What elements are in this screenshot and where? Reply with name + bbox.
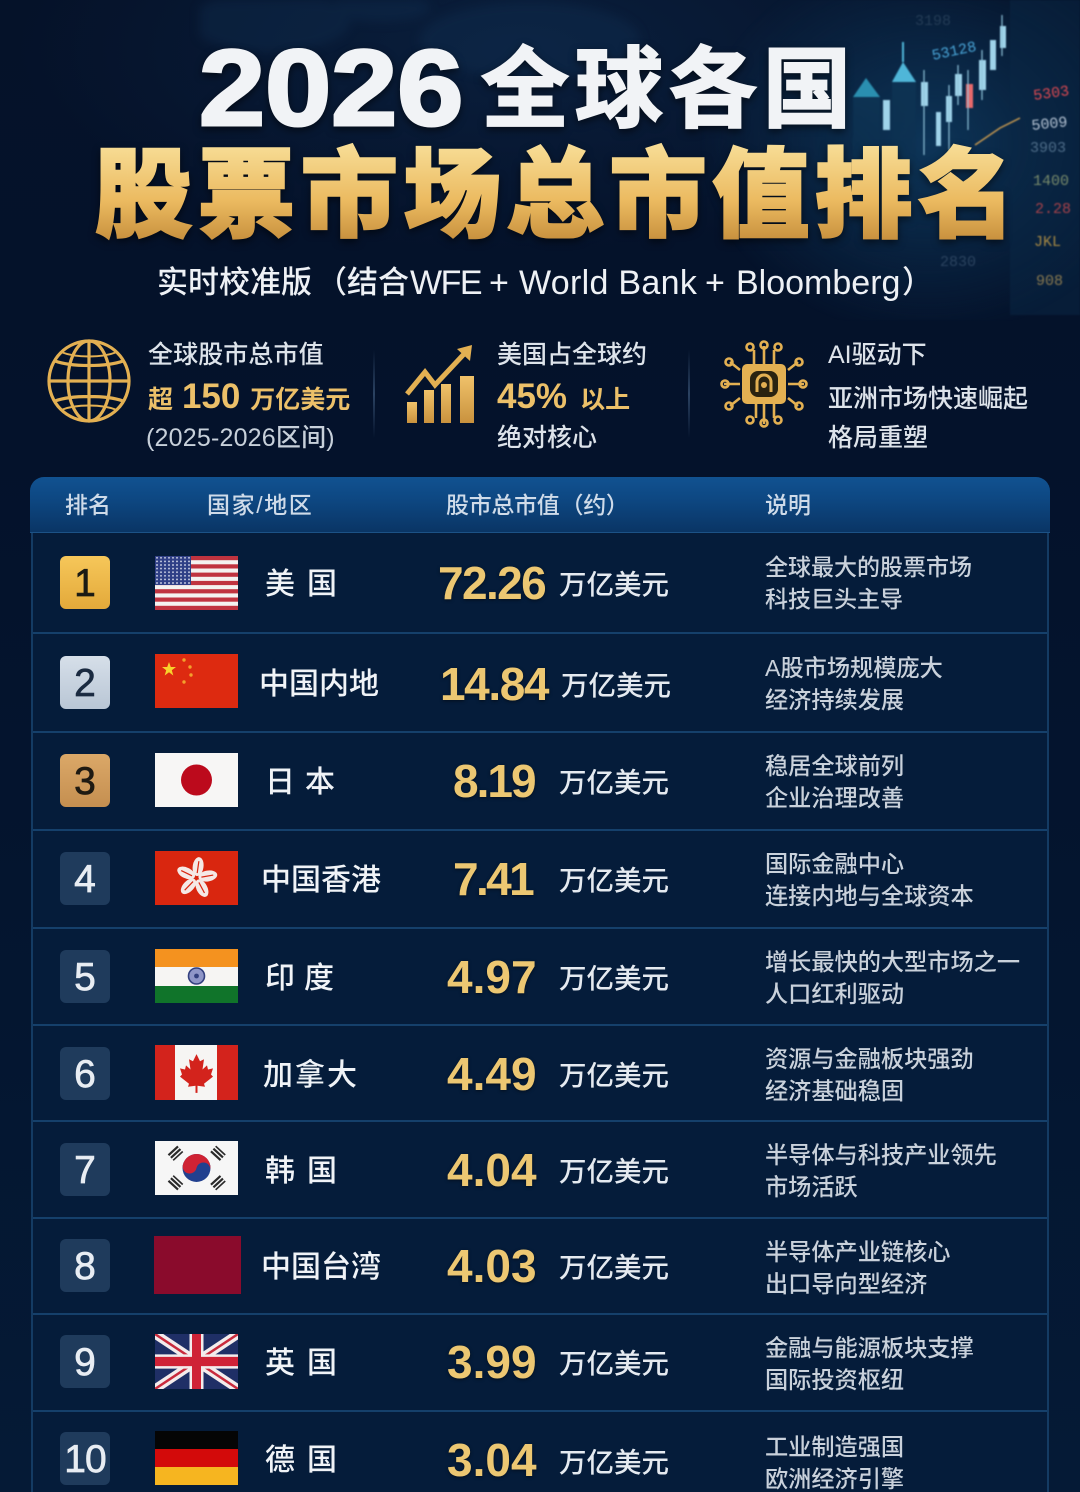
- row 2: rank badge: [60, 656, 110, 709]
- unit: 万亿美元: [559, 1447, 669, 1478]
- note: USA: [765, 554, 972, 612]
- unit: 万亿美元: [559, 963, 669, 994]
- note: USA: 科技巨头主导: [765, 586, 903, 612]
- background: skyline and market data: 2.28: [1035, 201, 1071, 218]
- flag: India: [155, 949, 238, 1003]
- flag: Germany: [155, 1431, 238, 1485]
- unit: 万亿美元: [559, 767, 669, 798]
- subtitle: +: [705, 264, 725, 302]
- country: South Korea: 韩国: [265, 1155, 349, 1188]
- stat: US share: 45% 以上: [497, 377, 630, 416]
- note: China mainland: A股市场规模庞大: [765, 655, 943, 681]
- value: Hong Kong: 7.41: [453, 853, 532, 905]
- flag: Hong Kong: [155, 851, 238, 905]
- value: Germany: 3.04: [447, 1434, 537, 1486]
- row 3: rank badge: [60, 754, 110, 807]
- value: South Korea: 4.04: [447, 1144, 537, 1196]
- note: Japan: [765, 753, 904, 811]
- country: China mainland: 中国内地: [259, 668, 379, 701]
- header: country: 国家/地区: [207, 492, 313, 518]
- flag: USA: [155, 556, 238, 610]
- note: USA: 全球最大的股票市场: [765, 554, 972, 580]
- note: China mainland: [765, 655, 943, 713]
- value: USA: 72.26: [438, 557, 545, 609]
- note: Germany: 工业制造强国: [765, 1434, 904, 1460]
- note: Germany: [765, 1434, 904, 1492]
- note: South Korea: [765, 1142, 997, 1200]
- icon: rising chart: [405, 345, 474, 423]
- row 8: rank badge: [60, 1239, 110, 1292]
- flag: China mainland: [155, 654, 238, 708]
- background: skyline and market data: 3903: [1030, 140, 1066, 157]
- unit: 万亿美元: [559, 1252, 669, 1283]
- header: rank: 排名: [65, 492, 111, 518]
- note: Germany: 欧洲经济引擎: [765, 1466, 904, 1492]
- note: Canada: [765, 1046, 974, 1104]
- value: China mainland: 14.84: [440, 658, 548, 710]
- flag: Japan: [155, 753, 238, 807]
- row 3: rank badge: 3: [74, 760, 96, 803]
- note: Japan: 企业治理改善: [765, 785, 904, 811]
- background: skyline and market data: 5009: [1031, 114, 1068, 135]
- country: India: 印度: [265, 962, 343, 995]
- icon: AI chip: [720, 340, 808, 428]
- value: Japan: 8.19: [453, 755, 535, 807]
- row 9: rank badge: 9: [74, 1341, 96, 1384]
- flag: South Korea: [155, 1141, 238, 1195]
- title: line one: 全球各国: [481, 40, 857, 139]
- country: USA: 美国: [265, 568, 349, 601]
- note: Taiwan: 出口导向型经济: [765, 1271, 927, 1297]
- unit: 万亿美元: [559, 1348, 669, 1379]
- unit: 万亿美元: [559, 1156, 669, 1187]
- row 8: rank badge: 8: [74, 1245, 96, 1288]
- subtitle: 实时校准版: [157, 265, 312, 300]
- subtitle: ）: [902, 265, 933, 300]
- value: UK: 3.99: [447, 1336, 537, 1388]
- note: UK: 金融与能源板块支撑: [765, 1335, 974, 1361]
- stat: AI and Asia: 格局重塑: [828, 424, 928, 452]
- background: faint world map: [202, 2, 632, 66]
- stat: AI and Asia: [828, 341, 1028, 452]
- title: line two: 股票市场总市值排名: [95, 141, 1021, 250]
- note: Hong Kong: [765, 851, 974, 909]
- icon: globe: [47, 339, 131, 423]
- background: skyline and market data: 908: [1036, 273, 1063, 290]
- country: Taiwan: 中国台湾: [261, 1251, 381, 1284]
- row 6: rank badge: 6: [74, 1053, 96, 1096]
- value: Taiwan: 4.03: [447, 1240, 537, 1292]
- stat: global market cap: 全球股市总市值: [148, 341, 324, 369]
- country: Hong Kong: 中国香港: [261, 864, 381, 897]
- row 5: rank badge: 5: [74, 956, 96, 999]
- note: Taiwan: 半导体产业链核心: [765, 1239, 950, 1265]
- stat: global market cap: [146, 341, 350, 452]
- row 4: rank badge: 4: [74, 858, 96, 901]
- note: China mainland: 经济持续发展: [765, 687, 904, 713]
- row 1: rank badge: [60, 556, 110, 609]
- row 4: rank badge: [60, 852, 110, 905]
- title: line one: [199, 28, 857, 149]
- row 10: rank badge: 10: [64, 1438, 106, 1481]
- stat: AI and Asia: 亚洲市场快速崛起: [828, 385, 1028, 413]
- row 7: rank badge: 7: [74, 1149, 96, 1192]
- stat: global market cap: (2025-2026区间): [146, 424, 335, 452]
- panel: ranking table: [31, 478, 1049, 1492]
- header: market cap: 股市总市值（约）: [446, 492, 629, 518]
- subtitle: +: [489, 264, 509, 302]
- background: skyline and market data: 1400: [1033, 173, 1069, 190]
- flag: Canada: [155, 1045, 238, 1100]
- note: South Korea: 市场活跃: [765, 1174, 858, 1200]
- unit: 万亿美元: [559, 1060, 669, 1091]
- row 10: rank badge: [60, 1432, 110, 1485]
- row 1: rank badge: 1: [74, 562, 96, 605]
- note: India: 人口红利驱动: [765, 981, 904, 1007]
- note: India: [765, 949, 1020, 1007]
- unit: 万亿美元: [559, 865, 669, 896]
- row 9: rank badge: [60, 1335, 110, 1388]
- subtitle: [157, 264, 933, 302]
- unit: 万亿美元: [561, 670, 671, 701]
- background: skyline and market data: 2830: [940, 254, 976, 271]
- value: India: 4.97: [447, 951, 537, 1003]
- row 6: rank badge: [60, 1047, 110, 1100]
- stat: global market cap: 超 150 万亿美元: [148, 377, 350, 416]
- country: UK: 英国: [265, 1347, 349, 1380]
- background: skyline and market data: [748, 0, 1080, 315]
- stat: AI and Asia: AI驱动下: [828, 341, 927, 369]
- subtitle: （: [316, 265, 347, 300]
- flag: Taiwan placeholder block: [154, 1236, 241, 1294]
- stat: US share: [497, 341, 647, 452]
- divider: [373, 350, 375, 438]
- subtitle: 结合: [347, 265, 409, 300]
- background: skyline and market data: JKL: [1034, 234, 1061, 251]
- flag: UK: [155, 1334, 238, 1389]
- note: Hong Kong: 国际金融中心: [765, 851, 904, 877]
- row 5: rank badge: [60, 950, 110, 1003]
- subtitle: World Bank: [519, 264, 697, 302]
- stat: US share: 绝对核心: [497, 424, 597, 452]
- note: Japan: 稳居全球前列: [765, 753, 904, 779]
- subtitle: Bloomberg: [736, 264, 900, 302]
- note: Hong Kong: 连接内地与全球资本: [765, 883, 974, 909]
- note: UK: 国际投资枢纽: [765, 1367, 904, 1393]
- background: skyline and market data: 5303: [1032, 83, 1070, 105]
- background: skyline and market data: 3198: [915, 13, 951, 30]
- country: Germany: 德国: [265, 1444, 349, 1477]
- stat: US share: 美国占全球约: [497, 341, 647, 369]
- unit: 万亿美元: [559, 569, 669, 600]
- note: India: 增长最快的大型市场之一: [765, 949, 1020, 975]
- note: UK: [765, 1335, 974, 1393]
- row 2: rank badge: 2: [74, 662, 96, 705]
- title block: [95, 28, 1021, 250]
- title: line one: 2026: [199, 28, 463, 149]
- note: Canada: 资源与金融板块强劲: [765, 1046, 974, 1072]
- row 7: rank badge: [60, 1143, 110, 1196]
- country: Canada: 加拿大: [263, 1059, 359, 1092]
- country: Japan: 日本: [265, 766, 345, 799]
- value: Canada: 4.49: [447, 1048, 537, 1100]
- note: Taiwan: [765, 1239, 950, 1297]
- divider: [688, 350, 690, 438]
- background: skyline and market data: 53128: [931, 39, 978, 65]
- header: note: 说明: [765, 492, 811, 518]
- note: South Korea: 半导体与科技产业领先: [765, 1142, 997, 1168]
- note: Canada: 经济基础稳固: [765, 1078, 904, 1104]
- table header: [30, 477, 1050, 533]
- subtitle: WFE: [410, 264, 481, 302]
